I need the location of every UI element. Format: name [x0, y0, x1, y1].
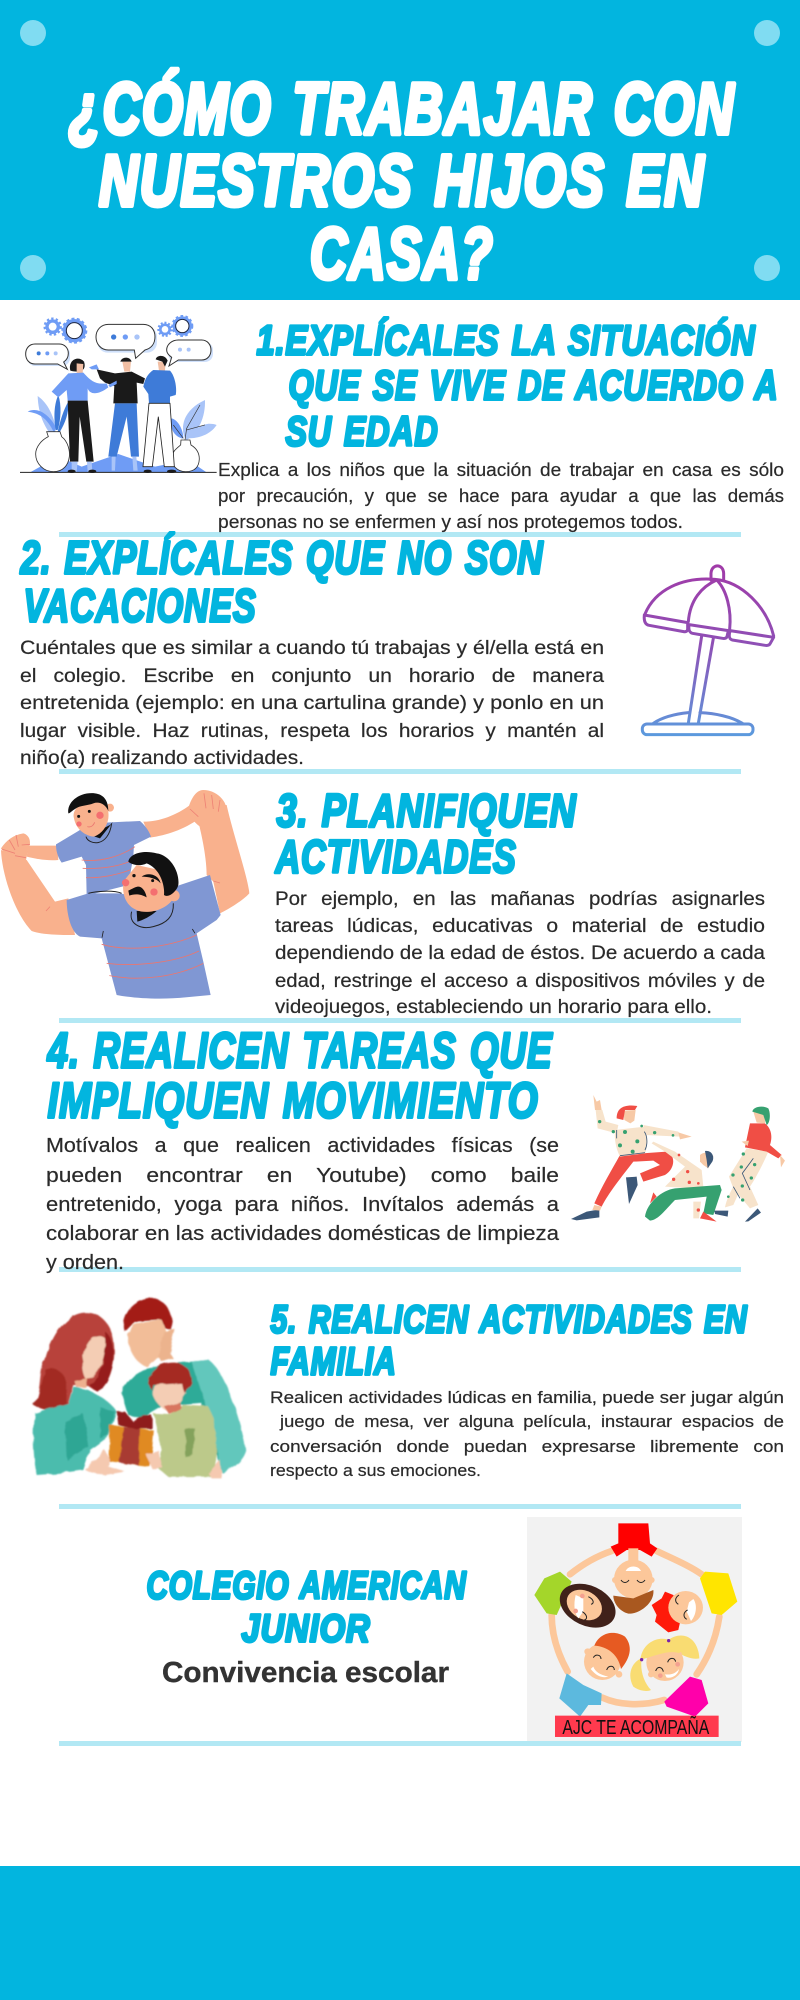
bottom divider [59, 1741, 741, 1746]
banner [555, 1716, 719, 1737]
gift [108, 1412, 153, 1467]
footer band [0, 1866, 800, 2000]
text: section 5: respecto a sus emociones. [270, 1462, 481, 1480]
subtitle: Convivencia escolar: Convivencia escolar [162, 1657, 449, 1689]
icon: beach umbrella [642, 566, 774, 735]
text: section 5 [270, 1389, 784, 1480]
top child [612, 1548, 655, 1614]
icon: children in a circle: AJC TE ACOMPAÑA [562, 1715, 710, 1739]
icon: three people talking [20, 316, 217, 473]
bottom right child [630, 1635, 699, 1691]
green-haired dancer [714, 1107, 785, 1222]
heading: section 3 [275, 784, 576, 882]
right child [652, 1591, 703, 1632]
text: section 1 [218, 459, 784, 532]
text: section 2: niño(a) realizando actividades. [20, 748, 304, 769]
heading: section 4: 4. REALICEN TAREAS QUE [47, 1022, 553, 1078]
text: section 3: tareas lúdicas, educativas o material de estudio [275, 916, 765, 937]
right man [158, 362, 166, 371]
text: section 4: pueden encontrar en Youtube) como baile [46, 1164, 559, 1187]
heading: section 4 [47, 1022, 553, 1128]
heading: section 2 [20, 532, 544, 632]
text: section 1: personas no se enfermen y así nos protegemos todos. [218, 511, 683, 532]
icon: children in a circle [527, 1517, 742, 1742]
text: section 5: Realicen actividades lúdicas en familia, puede ser jugar algún [270, 1389, 784, 1407]
icon: watercolour family [33, 1298, 246, 1478]
heading: section 2: VACACIONES [24, 580, 256, 632]
text: section 3 [275, 889, 765, 1018]
text: section 1: Explica a los niños que la situación de trabajar en casa es sólo [218, 459, 784, 480]
bottom left child [584, 1633, 630, 1680]
heading: school name: JUNIOR [242, 1608, 370, 1650]
icon: father carrying son [1, 790, 249, 999]
title [69, 70, 735, 294]
left child [553, 1575, 623, 1636]
heading: section 3: 3. PLANIFIQUEN [276, 784, 576, 836]
text: section 2 [20, 638, 604, 769]
heading: school name [146, 1564, 466, 1650]
header band [0, 0, 800, 300]
father [122, 1298, 246, 1473]
kneeling dancer [645, 1142, 722, 1222]
text: section 2: lugar visible. Haz rutinas, respeta los horarios y mantén al [20, 721, 604, 742]
divider lines [59, 532, 741, 1509]
child [148, 1363, 217, 1477]
arms [552, 1551, 719, 1704]
heading: section 3: ACTIVIDADES [275, 830, 516, 882]
text: section 3: dependiendo de la edad de éstos. De acuerdo a cada [275, 943, 765, 964]
shirts [611, 1523, 657, 1557]
woman [70, 359, 85, 372]
red-haired dancer [571, 1095, 692, 1220]
text: section 3: Por ejemplo, en las mañanas podrías asignarles [275, 889, 765, 910]
heading: school name: COLEGIO AMERICAN [146, 1564, 466, 1608]
heading: section 1: SU EDAD [286, 408, 438, 454]
heading: section 5: FAMILIA [270, 1340, 396, 1384]
text: section 4: colaborar en las actividades domésticas de limpieza [46, 1222, 560, 1245]
icon: three people dancing [571, 1095, 785, 1222]
text: section 4: Motívalos a que realicen actividades físicas (se [46, 1134, 559, 1157]
text: section 2: entretenida (ejemplo: en una cartulina grande) y ponlo en un [20, 693, 604, 714]
text: section 4 [46, 1134, 560, 1274]
heading: section 2: 2. EXPLÍCALES QUE NO SON [20, 532, 544, 584]
text: section 4: y orden. [46, 1251, 124, 1274]
text: section 1: por precaución, y que se hace para ayudar a que las demás [218, 485, 784, 506]
text: section 4: entretenido, yoga para niños. Invítalos además a [46, 1193, 560, 1216]
heading: section 5 [270, 1298, 748, 1384]
text: section 2: Cuéntales que es similar a cuando tú trabajas y él/ella está en [20, 638, 604, 659]
text: section 5: juego de mesa, ver alguna película, instaurar espacios de [279, 1413, 784, 1431]
heading: section 4: IMPLIQUEN MOVIMIENTO [48, 1072, 538, 1128]
middle man [122, 362, 131, 372]
text: section 2: el colegio. Escribe en conjunto un horario de manera [20, 666, 604, 687]
text: section 5: conversación donde puedan expresarse libremente con [270, 1438, 784, 1456]
heading: section 1 [256, 316, 778, 454]
mother [33, 1313, 117, 1475]
text: section 3: edad, restringe el acceso a dispositivos móviles y de [275, 971, 765, 992]
text: section 3: videojuegos, estableciendo un horario para ello. [275, 997, 712, 1018]
title: CASA? [310, 214, 494, 294]
